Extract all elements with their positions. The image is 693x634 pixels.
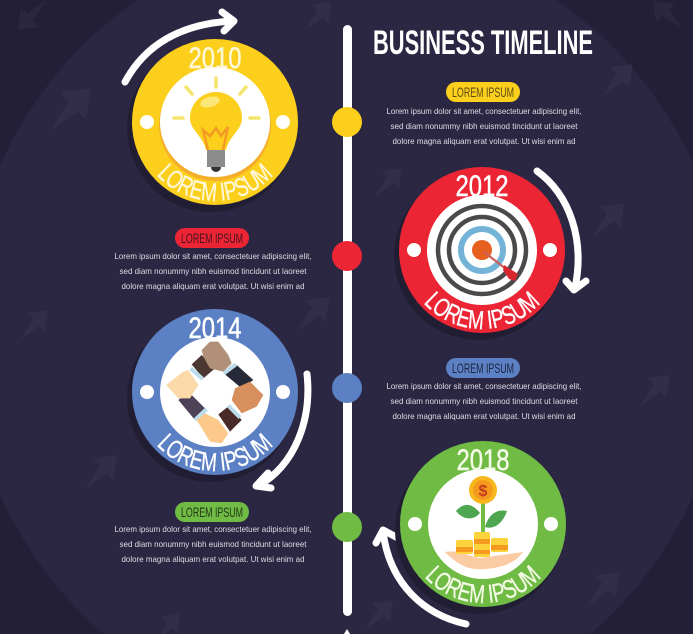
pill label (446, 82, 520, 102)
curved label: LOREM IPSUM (425, 564, 541, 604)
timeline dot: blue (332, 373, 362, 403)
icon: money plant (445, 476, 523, 569)
pill label: LOREM IPSUM (452, 360, 514, 376)
text block: green: sed diam nonummy nibh euismod tincidunt ut laoreet (120, 539, 307, 549)
pill label: LOREM IPSUM (181, 230, 243, 246)
icon: money plant: $ (479, 483, 488, 500)
text block: yellow: Lorem ipsum dolor sit amet, consectetuer adipiscing elit, (386, 106, 582, 116)
text block: red: dolore magna aliquam erat volutpat. Ut wisi enim ad (122, 281, 305, 291)
year: 2010 (188, 42, 242, 75)
text block: blue: Lorem ipsum dolor sit amet, consectetuer adipiscing elit, (386, 381, 582, 391)
pill label (175, 228, 249, 248)
curved label: LOREM IPSUM (157, 162, 273, 202)
icon: joined hands (166, 342, 263, 443)
badge: 2014 (127, 309, 298, 482)
icon: light bulb (174, 78, 259, 172)
text block: yellow: dolore magna aliquam erat volutpat. Ut wisi enim ad (392, 136, 576, 146)
arrow 2014 (256, 374, 308, 488)
arrow 2010 (125, 12, 234, 82)
badge: 2010 (127, 39, 298, 212)
text block: yellow (386, 82, 582, 146)
bottom tick (344, 629, 350, 634)
pill label: LOREM IPSUM (181, 504, 243, 520)
year: 2018 (456, 444, 510, 477)
badge: 2012 (394, 167, 565, 340)
text block: blue (386, 358, 582, 421)
curved label: LOREM IPSUM (157, 432, 273, 472)
arrow 2018 (376, 530, 466, 624)
text block: red (114, 228, 312, 291)
text block: blue: sed diam nonummy nibh euismod tincidunt ut laoreet (390, 396, 578, 406)
arrow 2012 (537, 171, 586, 290)
timeline dot: yellow (332, 107, 362, 137)
text block: red: sed diam nonummy nibh euismod tincidunt ut laoreet (120, 266, 307, 276)
timeline line (343, 25, 352, 616)
pill label: LOREM IPSUM (452, 84, 514, 100)
text block: blue: dolore magna aliquam erat volutpat. Ut wisi enim ad (392, 411, 576, 421)
timeline dot: red (332, 241, 362, 271)
text block: red: Lorem ipsum dolor sit amet, consectetuer adipiscing elit, (114, 251, 312, 261)
text block: green: Lorem ipsum dolor sit amet, consectetuer adipiscing elit, (114, 524, 312, 534)
curved label: LOREM IPSUM (424, 290, 540, 330)
icon: target (438, 206, 526, 294)
text block: yellow: sed diam nonummy nibh euismod tincidunt ut laoreet (390, 121, 578, 131)
year: 2012 (456, 170, 508, 203)
pill label (175, 502, 249, 522)
year: 2014 (188, 312, 242, 345)
pill label (446, 358, 520, 378)
text block: green: dolore magna aliquam erat volutpat. Ut wisi enim ad (122, 554, 305, 564)
text block: green (114, 502, 312, 564)
timeline dot: green (332, 512, 362, 542)
badge: 2018 (395, 441, 566, 614)
